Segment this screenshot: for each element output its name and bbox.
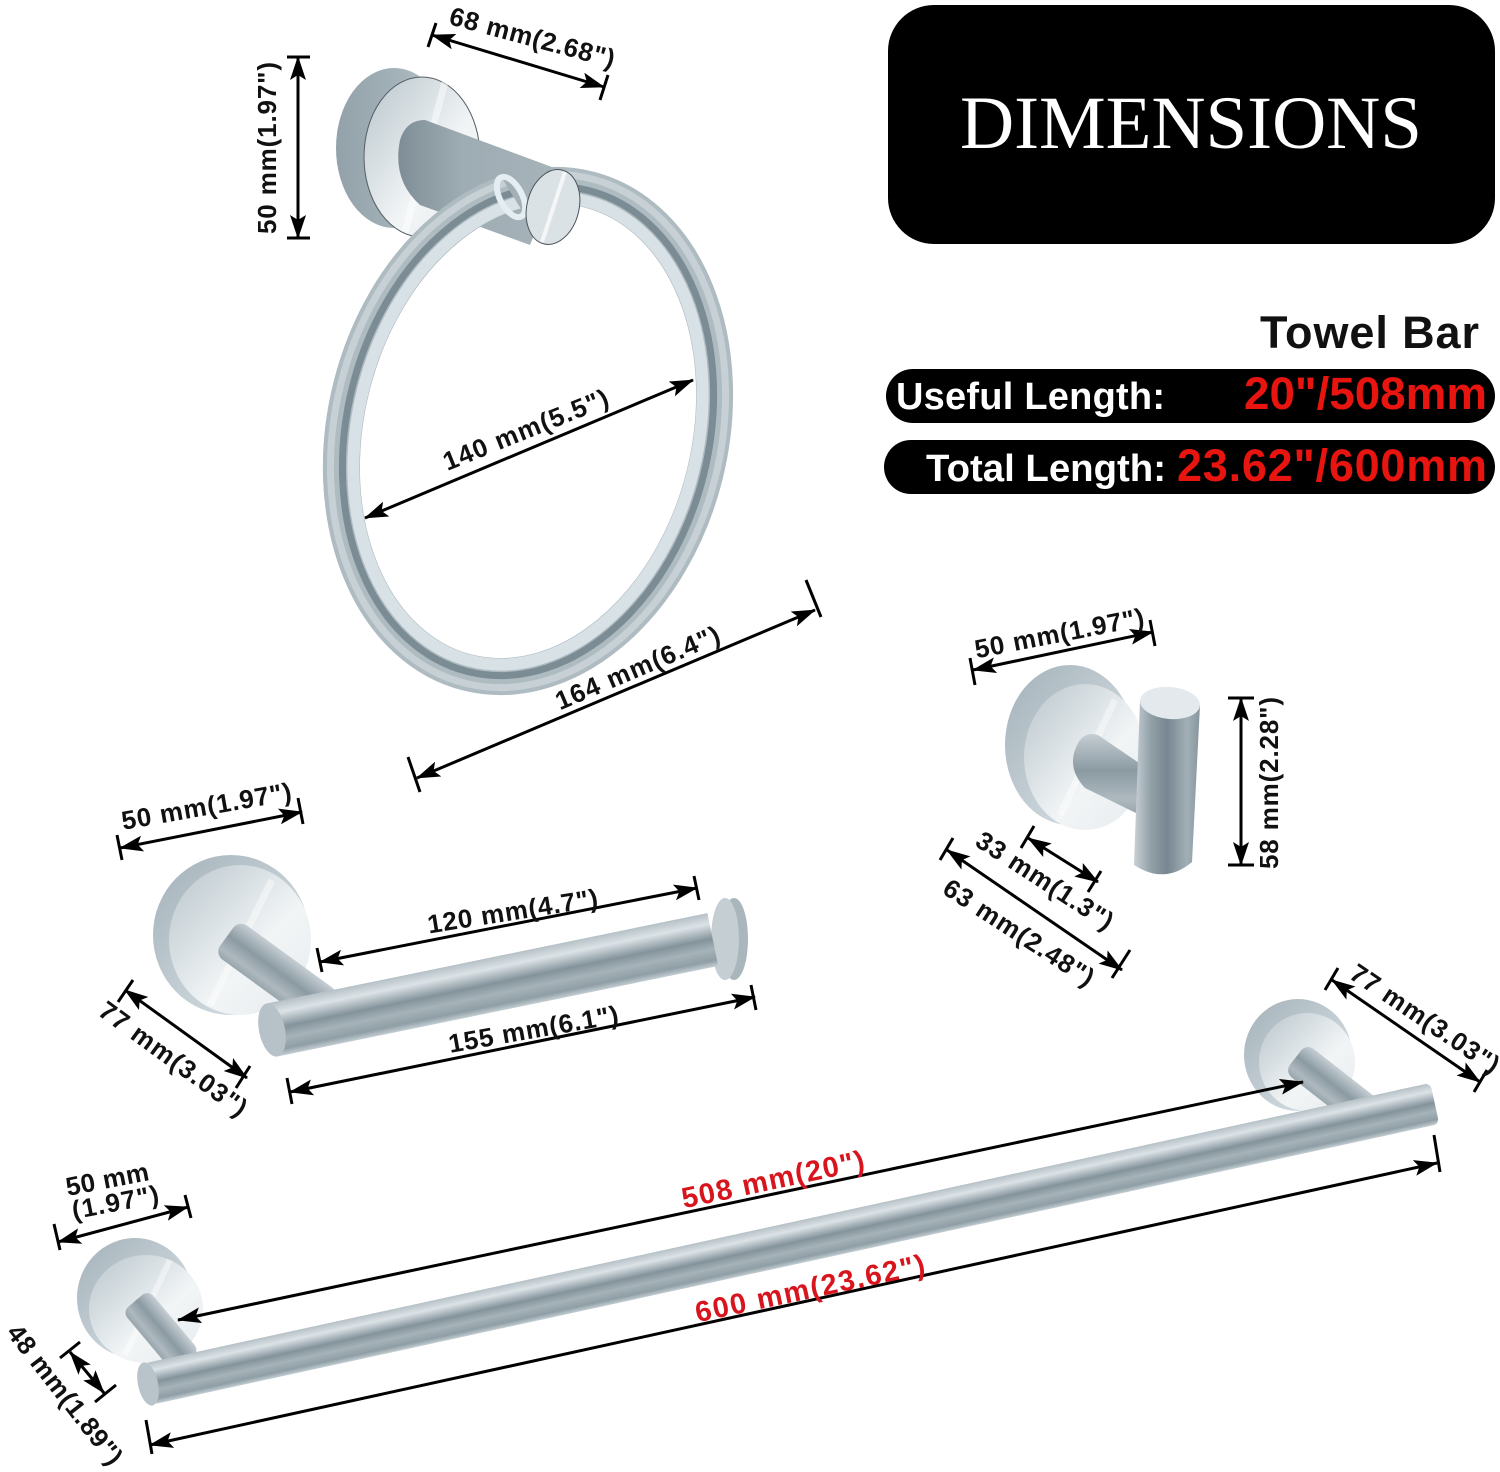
dimension: holder depth: 77 mm(3.03") [93, 995, 253, 1123]
total length pill: 23.62"/600mm [1177, 440, 1487, 491]
dimension: hook height: 58 mm(2.28") [1254, 697, 1284, 869]
dimension: bar mount width: 50 mm [63, 1156, 151, 1202]
dimension: bar total length [146, 1135, 1440, 1454]
towel ring illustration [322, 68, 734, 696]
dimension: holder useful length [317, 876, 699, 972]
dimension: holder mount width [117, 776, 303, 860]
dimension: bar useful length: 508 mm(20") [679, 1145, 867, 1215]
dimension: hook mount width: 50 mm(1.97") [972, 602, 1147, 664]
dimension: hook depth total: 63 mm(2.48") [938, 872, 1100, 992]
dimension: ring depth [408, 580, 821, 792]
dimension: bar mount width [54, 1156, 191, 1250]
dimension: ring inner diameter [365, 380, 693, 518]
dimension: holder total length [287, 985, 756, 1104]
dimension: holder mount width: 50 mm(1.97") [119, 776, 294, 836]
title text: DIMENSIONS [960, 82, 1422, 165]
total length pill: Total Length: [926, 448, 1166, 490]
title badge [888, 5, 1495, 244]
toilet paper holder illustration [153, 855, 748, 1059]
dimension: ring mount width [428, 1, 618, 100]
useful length pill: Useful Length: [896, 376, 1165, 418]
dimension: bar useful length [178, 1082, 1303, 1320]
useful length pill [886, 368, 1495, 423]
useful length pill: 20"/508mm [1244, 368, 1487, 419]
hook illustration [1005, 665, 1201, 874]
dimension: bar mount offset: 48 mm(1.89") [1, 1318, 129, 1471]
dimension: bar mount width: (1.97") [69, 1179, 161, 1225]
dimension: ring mount height: 50 mm(1.97") [252, 62, 282, 234]
dimension: hook depth total [938, 838, 1130, 992]
dimension: holder useful length: 120 mm(4.7") [425, 883, 600, 939]
dimension: ring depth: 164 mm(6.4") [551, 620, 724, 716]
dimension: ring mount width: 68 mm(2.68") [446, 1, 618, 74]
dimension: hook depth short: 33 mm(1.3") [970, 825, 1119, 936]
dimension: holder total length: 155 mm(6.1") [446, 999, 621, 1059]
dimension: ring inner diameter: 140 mm(5.5") [438, 383, 613, 477]
total length pill [884, 440, 1495, 494]
heading: towel bar: Towel Bar [1260, 307, 1479, 358]
towel bar illustration [77, 999, 1439, 1408]
dimension: bar total length: 600 mm(23.62") [692, 1249, 928, 1329]
